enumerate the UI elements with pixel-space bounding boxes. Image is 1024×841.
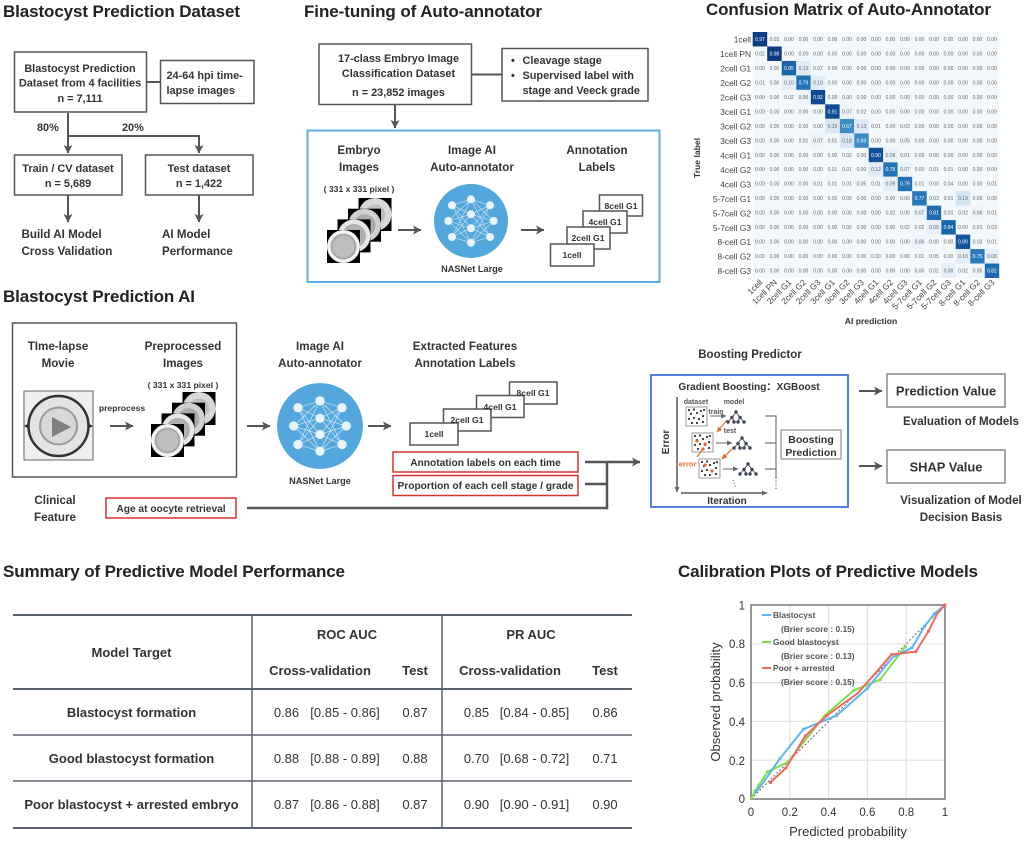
row: blastocyst formation: Blastocyst formation bbox=[67, 705, 196, 720]
legend: (Brier score : 0.15) bbox=[781, 624, 855, 634]
row labels: 5-7cell G3 bbox=[713, 223, 751, 233]
box: proportion of each cell stage bbox=[393, 476, 578, 496]
arrow: dataset to auto-annotator bbox=[394, 105, 396, 128]
heading: image AI auto-annotator: Auto-annotator bbox=[278, 357, 362, 370]
heading: annotation labels: Annotation bbox=[566, 144, 628, 157]
arrow: to auto-annotator bbox=[247, 425, 270, 427]
box: proportion of each cell stage: Proportion of each cell stage / grade bbox=[397, 481, 574, 492]
axis label: AI prediction: AI prediction bbox=[845, 316, 897, 326]
column labels: 2cell G2 bbox=[779, 277, 808, 306]
axis label: predicted probability: Predicted probability bbox=[789, 824, 907, 839]
row: poor blastocyst: [0.90 - 0.91] bbox=[500, 797, 569, 812]
chart: calibration plot bbox=[708, 600, 948, 839]
series: good blastocyst bbox=[751, 645, 907, 799]
box: train dataset: Train / CV dataset bbox=[22, 163, 114, 175]
row: blastocyst formation bbox=[67, 705, 618, 720]
chart: confusion matrix: 0.00 0.00 0.85 0.13 0.02 0.00 0.00 0.00 0.00 0.00 0.00 0.00 0.00 0.00 0.00 0.00 0.00 bbox=[755, 66, 997, 72]
row: good blastocyst formation: Good blastocyst formation bbox=[49, 751, 214, 766]
icon: movie play button bbox=[24, 391, 93, 460]
table header: PR AUC bbox=[506, 627, 556, 642]
label: image size: ( 331 x 331 pixel ) bbox=[324, 184, 394, 194]
row: good blastocyst formation: 0.88 bbox=[402, 751, 428, 766]
panel: auto-annotator training bbox=[308, 130, 660, 282]
box: time-lapse images bbox=[160, 60, 254, 104]
row labels: 3cell G3 bbox=[720, 136, 751, 146]
model trees bbox=[726, 410, 758, 476]
error arrows bbox=[697, 420, 732, 459]
box: SHAP value: SHAP Value bbox=[910, 460, 982, 474]
box: annotation labels on each time bbox=[393, 452, 578, 472]
box: prediction value bbox=[887, 374, 1005, 407]
row labels: 8-cell G2 bbox=[717, 252, 751, 262]
heading: time-lapse movie: Movie bbox=[42, 357, 75, 370]
chart: confusion matrix: 0.00 0.00 0.00 0.00 0.00 0.00 0.02 0.00 0.90 0.08 0.01 0.00 0.00 0.00 0.00 0.00 0.00 bbox=[755, 153, 997, 159]
icon: preprocessed image stack bbox=[151, 392, 216, 457]
column labels: 8-cell G2 bbox=[951, 277, 982, 308]
stack of annotation labels bbox=[410, 382, 557, 445]
axis label: observed probability: Observed probability bbox=[708, 642, 723, 762]
box: classification dataset: n = 23,852 images bbox=[352, 87, 445, 99]
row: blastocyst formation: [0.85 - 0.86] bbox=[310, 705, 380, 720]
stack of annotation labels bbox=[550, 195, 642, 266]
row: good blastocyst formation: [0.88 - 0.89] bbox=[310, 751, 380, 766]
box: label description bbox=[502, 48, 648, 101]
row: blastocyst formation: 0.85 bbox=[464, 705, 489, 720]
arrow bbox=[398, 229, 421, 231]
table header: Cross-validation bbox=[459, 663, 561, 678]
text: visualization: Decision Basis bbox=[920, 511, 1002, 524]
diagram labels: test bbox=[724, 428, 737, 435]
column labels: 4cell G2 bbox=[866, 277, 895, 306]
column labels: 3cell G1 bbox=[808, 277, 837, 306]
stack of annotation labels: 1cell bbox=[424, 429, 444, 439]
box: classification dataset: 17-class Embryo Image bbox=[338, 53, 459, 65]
heading: image AI: Image AI bbox=[448, 144, 496, 157]
column labels: 3cell G3 bbox=[837, 277, 866, 306]
row labels: 5-7cell G2 bbox=[713, 208, 751, 218]
stack of annotation labels: 2cell G1 bbox=[451, 415, 484, 425]
chart: confusion matrix: 0.00 0.00 0.00 0.00 0.00 0.00 0.00 0.00 0.00 0.00 0.00 0.01 0.05 0.00 0.10 0.75 0.08 bbox=[755, 254, 997, 260]
box: annotation labels on each time: Annotation labels on each time bbox=[410, 458, 561, 469]
arrow: to prediction value bbox=[859, 390, 882, 392]
row: good blastocyst formation: [0.68 - 0.72] bbox=[500, 751, 569, 766]
row: blastocyst formation: 0.86 bbox=[592, 705, 618, 720]
chart: confusion matrix: 0.00 0.00 0.00 0.00 0.00 0.01 0.01 0.00 0.12 0.78 0.07 0.00 0.01 0.01 0.00 0.00 0.00 bbox=[755, 167, 997, 173]
y axis ticks bbox=[729, 600, 746, 806]
chart: confusion matrix: 0.00 0.00 0.00 0.00 0.01 0.01 0.01 0.05 0.01 0.09 0.79 0.01 0.00 0.04 0.00 0.00 0.01 bbox=[755, 182, 997, 188]
column labels: 3cell G2 bbox=[823, 277, 852, 306]
stack of annotation labels: 4cell G1 bbox=[484, 402, 517, 412]
arrow: to SHAP value bbox=[859, 465, 882, 467]
chart: confusion matrix: 0.02 0.98 0.00 0.00 0.00 0.00 0.00 0.00 0.00 0.00 0.00 0.00 0.00 0.00 0.00 0.00 0.00 bbox=[755, 52, 997, 58]
text: AI model performance: AI Model bbox=[162, 228, 210, 241]
icon: embryo image stack bbox=[327, 198, 392, 263]
box: test dataset bbox=[146, 155, 253, 195]
row labels: 2cell G2 bbox=[720, 78, 751, 88]
table header bbox=[92, 627, 619, 678]
heading: extracted features: Annotation Labels bbox=[414, 357, 516, 370]
row labels bbox=[713, 35, 751, 276]
column labels: 2cell G1 bbox=[765, 277, 794, 306]
column labels: 4cell G1 bbox=[852, 277, 881, 306]
diagram labels: dataset bbox=[684, 399, 709, 406]
row labels: 1cell bbox=[734, 35, 751, 45]
iteration arrows bbox=[710, 416, 738, 469]
panel: fine-tuning flowchart bbox=[308, 44, 660, 282]
diagram labels bbox=[679, 399, 744, 468]
row labels: 8-cell G3 bbox=[717, 266, 751, 276]
legend bbox=[762, 610, 855, 687]
text: clinical feature: Feature bbox=[34, 511, 76, 524]
box: train dataset: n = 5,689 bbox=[45, 178, 91, 190]
row: poor blastocyst: 0.87 bbox=[274, 797, 299, 812]
axis: iteration bbox=[681, 493, 767, 507]
row: good blastocyst formation: 0.71 bbox=[592, 751, 618, 766]
x axis ticks: 0.4 bbox=[821, 807, 837, 819]
heading: boosting predictor: Boosting Predictor bbox=[698, 349, 802, 361]
legend: Blastocyst bbox=[773, 610, 816, 620]
diagram labels: error bbox=[679, 460, 696, 468]
chart: confusion matrix: 0.00 0.00 0.00 0.00 0.00 0.00 0.00 0.00 0.00 0.00 0.00 0.00 0.02 0.09 0.02 0.05 0.82 bbox=[755, 268, 997, 274]
x axis ticks: 1 bbox=[942, 807, 948, 819]
column labels: 5-7cell G1 bbox=[890, 277, 924, 311]
heading: preprocessed images: Preprocessed bbox=[145, 340, 221, 353]
box: blastocyst prediction dataset: Blastocyst Prediction bbox=[24, 63, 136, 75]
arrow: to extracted features bbox=[368, 425, 391, 427]
heading: embryo images: Embryo bbox=[337, 144, 381, 157]
legend: (Brier score : 0.15) bbox=[781, 677, 855, 687]
ensemble bracket bbox=[765, 416, 776, 490]
box: test dataset: Test dataset bbox=[168, 163, 231, 175]
axis: error: Error bbox=[661, 430, 672, 454]
box: classification dataset: Classification Dataset bbox=[342, 68, 455, 80]
title: Blastocyst Prediction AI: Blastocyst Prediction AI bbox=[3, 287, 195, 306]
box: prediction value: Prediction Value bbox=[896, 384, 996, 398]
y axis ticks: 0.4 bbox=[729, 717, 746, 729]
x axis ticks: 0.6 bbox=[859, 807, 875, 819]
chart: confusion matrix: 0.00 0.00 0.02 0.06 0.92 0.00 0.00 0.00 0.00 0.00 0.00 0.00 0.00 0.00 0.00 0.00 0.00 bbox=[755, 95, 997, 101]
box: label description: Cleavage stage bbox=[522, 55, 602, 67]
arrow: test to performance bbox=[198, 195, 200, 222]
box: blastocyst prediction dataset: Dataset from 4 facilities bbox=[19, 78, 141, 90]
series: poor + arrested bbox=[769, 603, 947, 784]
row labels: 8-cell G1 bbox=[717, 237, 751, 247]
text: AI model performance: Performance bbox=[162, 245, 233, 258]
heading: preprocessed images: Images bbox=[163, 357, 203, 370]
box: time-lapse images: lapse images bbox=[166, 85, 235, 97]
box: boosting prediction: Prediction bbox=[785, 447, 837, 459]
chart: confusion matrix: 0.01 0.00 0.10 0.79 0.10 0.00 0.00 0.00 0.00 0.00 0.00 0.00 0.00 0.00 0.00 0.00 0.00 bbox=[755, 80, 997, 86]
title: Fine-tuning of Auto-annotator: Fine-tuning of Auto-annotator bbox=[304, 2, 542, 21]
row: blastocyst formation: 0.86 bbox=[274, 705, 299, 720]
table: model performance bbox=[13, 615, 632, 828]
box: time-lapse images: 24-64 hpi time- bbox=[166, 70, 243, 82]
chart: confusion matrix: 0.00 0.00 0.00 0.00 0.00 0.00 0.00 0.00 0.00 0.02 0.00 0.07 0.81 0.01 0.02 0.06 0.01 bbox=[755, 211, 997, 217]
row labels: 2cell G3 bbox=[720, 93, 751, 103]
stack of annotation labels: 8cell G1 bbox=[517, 388, 550, 398]
series: blastocyst bbox=[755, 605, 945, 793]
stack of annotation labels: 1cell bbox=[562, 250, 582, 260]
chart: confusion matrix: 0.00 0.00 0.00 0.01 0.07 0.01 0.18 0.69 0.00 0.00 0.05 0.00 0.00 0.00 0.00 0.00 0.00 bbox=[755, 138, 997, 144]
arrow: features to boosting predictor bbox=[247, 462, 640, 508]
heading: gradient boosting: Gradient Boosting：XGBoost bbox=[678, 382, 820, 393]
stack of annotation labels: 8cell G1 bbox=[605, 201, 638, 211]
chart: confusion matrix: 0.00 0.00 0.00 0.00 0.00 0.16 0.67 0.13 0.01 0.00 0.02 0.00 0.00 0.00 0.00 0.00 0.00 bbox=[755, 124, 997, 130]
table header: Test bbox=[592, 663, 619, 678]
arrow: preprocess bbox=[110, 425, 133, 427]
label: image size: ( 331 x 331 pixel ) bbox=[148, 380, 218, 390]
axis: error bbox=[661, 397, 677, 492]
row: good blastocyst formation: 0.70 bbox=[464, 751, 489, 766]
box: test dataset: n = 1,422 bbox=[176, 178, 222, 190]
table header: ROC AUC bbox=[317, 627, 378, 642]
legend: (Brier score : 0.13) bbox=[781, 651, 855, 661]
box: SHAP value bbox=[887, 450, 1005, 483]
stack of annotation labels: 4cell G1 bbox=[589, 217, 622, 227]
row: poor blastocyst bbox=[24, 797, 618, 812]
icon: neural network bbox=[434, 184, 508, 258]
axis label: true label: True label bbox=[692, 138, 702, 178]
column labels: 8-cell G1 bbox=[937, 277, 968, 308]
arrow bbox=[521, 229, 544, 231]
box: train dataset bbox=[14, 155, 122, 195]
title: Confusion Matrix of Auto-Annotator: Confusion Matrix of Auto-Annotator bbox=[706, 0, 991, 19]
heading: extracted features: Extracted Features bbox=[413, 340, 517, 353]
row labels: 3cell G1 bbox=[720, 107, 751, 117]
x axis ticks bbox=[748, 807, 948, 819]
text: visualization: Visualization of Model bbox=[900, 494, 1022, 507]
box: age at oocyte retrieval bbox=[106, 498, 236, 518]
box: age at oocyte retrieval: Age at oocyte retrieval bbox=[116, 504, 226, 515]
x axis ticks: 0.8 bbox=[898, 807, 914, 819]
box: boosting prediction: Boosting bbox=[788, 434, 834, 446]
box: blastocyst prediction dataset bbox=[14, 52, 146, 112]
x axis ticks: 0.2 bbox=[782, 807, 798, 819]
y axis ticks: 0.6 bbox=[729, 678, 745, 690]
row: poor blastocyst: Poor blastocyst + arrested embryo bbox=[24, 797, 239, 812]
text: clinical feature: Clinical bbox=[34, 494, 76, 507]
panel: movie preprocessing bbox=[12, 323, 236, 477]
box: label description: stage and Veeck grade bbox=[522, 85, 640, 97]
row labels: 3cell G2 bbox=[720, 122, 751, 132]
heading: image AI auto-annotator: Image AI bbox=[296, 340, 344, 353]
column labels: 5-7cell G2 bbox=[904, 277, 939, 311]
label: 20%: 20% bbox=[122, 122, 144, 134]
icon: neural network bbox=[277, 383, 363, 469]
text: build AI model: Build AI Model bbox=[22, 228, 102, 241]
chart: confusion matrix: 0.00 0.00 0.00 0.00 0.00 0.00 0.00 0.00 0.00 0.00 0.00 0.06 0.00 0.00 0.89 0.03 0.01 bbox=[755, 240, 997, 246]
panel: gradient boosting bbox=[651, 375, 848, 507]
y axis ticks: 1 bbox=[739, 600, 745, 612]
row labels: 1cell PN bbox=[720, 49, 751, 59]
column labels: 5-7cell G3 bbox=[919, 277, 953, 311]
row labels: 2cell G1 bbox=[720, 64, 751, 74]
title: Calibration Plots of Predictive Models: Calibration Plots of Predictive Models bbox=[678, 562, 978, 581]
box: blastocyst prediction dataset: n = 7,111 bbox=[57, 93, 103, 105]
diagram labels: model bbox=[724, 399, 744, 406]
box: classification dataset bbox=[319, 44, 472, 104]
text: build AI model: Cross Validation bbox=[22, 245, 112, 258]
x axis ticks: 0 bbox=[748, 807, 754, 819]
y axis ticks: 0.8 bbox=[729, 639, 745, 651]
chart: confusion matrix: 0.00 0.00 0.00 0.00 0.00 0.00 0.00 0.00 0.00 0.00 0.02 0.02 0.09 0.84 0.00 0.01 0.03 bbox=[755, 225, 997, 231]
box: label description: Supervised label with bbox=[522, 70, 634, 82]
row: poor blastocyst: 0.90 bbox=[592, 797, 618, 812]
text: evaluation of models: Evaluation of Models bbox=[903, 415, 1019, 428]
label: NASNet Large: NASNet Large bbox=[441, 264, 503, 274]
box: boosting prediction bbox=[781, 430, 841, 459]
column labels bbox=[745, 277, 997, 311]
box: label description: • bbox=[511, 55, 515, 67]
heading: time-lapse movie: TIme-lapse bbox=[28, 340, 88, 353]
y axis ticks: 0 bbox=[739, 794, 745, 806]
row labels: 4cell G3 bbox=[720, 179, 751, 189]
column labels: 8-cell G3 bbox=[966, 277, 997, 308]
column labels: 4cell G3 bbox=[881, 277, 910, 306]
title: Summary of Predictive Model Performance: Summary of Predictive Model Performance bbox=[3, 562, 345, 581]
row: poor blastocyst: 0.90 bbox=[464, 797, 489, 812]
table header: Model Target bbox=[92, 645, 172, 660]
dataset squares bbox=[686, 407, 720, 478]
chart: confusion matrix: 0.97 0.03 0.00 0.00 0.00 0.00 0.00 0.00 0.00 0.00 0.00 0.00 0.00 0.00 0.00 0.00 0.00 bbox=[755, 37, 997, 43]
legend: Good blastocyst bbox=[773, 637, 839, 647]
column labels: 2cell G3 bbox=[794, 277, 823, 306]
stack of annotation labels: 2cell G1 bbox=[572, 233, 605, 243]
table header: Test bbox=[402, 663, 429, 678]
y axis ticks: 0.2 bbox=[729, 756, 745, 768]
row labels: 4cell G2 bbox=[720, 165, 751, 175]
heading: annotation labels: Labels bbox=[579, 161, 615, 174]
heading: image AI: Auto-annotator bbox=[430, 161, 514, 174]
axis: iteration: Iteration bbox=[707, 496, 747, 507]
arrow: split to train and test bbox=[68, 113, 199, 153]
chart: confusion matrix bbox=[692, 32, 999, 326]
diagram labels: train bbox=[708, 409, 724, 416]
row: blastocyst formation: 0.87 bbox=[402, 705, 428, 720]
row: good blastocyst formation bbox=[49, 751, 618, 766]
chart: confusion matrix: 0.00 0.00 0.00 0.00 0.00 0.00 0.00 0.00 0.00 0.00 0.00 0.77 0.03 0.01 0.19 0.00 0.00 bbox=[755, 196, 997, 202]
row: good blastocyst formation: 0.88 bbox=[274, 751, 299, 766]
column labels: 1cell PN bbox=[750, 277, 779, 306]
heading: embryo images: Images bbox=[339, 161, 379, 174]
chart: confusion matrix: 0.00 0.00 0.00 0.00 0.00 0.91 0.07 0.02 0.00 0.00 0.00 0.00 0.00 0.00 0.00 0.00 0.00 bbox=[755, 109, 997, 115]
row: poor blastocyst: [0.86 - 0.88] bbox=[310, 797, 380, 812]
row: blastocyst formation: [0.84 - 0.85] bbox=[500, 705, 569, 720]
table header: Cross-validation bbox=[269, 663, 371, 678]
label: 80%: 80% bbox=[37, 122, 59, 134]
row labels: 4cell G1 bbox=[720, 150, 751, 160]
label: NASNet Large: NASNet Large bbox=[289, 476, 351, 486]
box: label description: • bbox=[511, 70, 515, 82]
row: poor blastocyst: 0.87 bbox=[402, 797, 428, 812]
title: Blastocyst Prediction Dataset: Blastocyst Prediction Dataset bbox=[3, 2, 240, 21]
label: preprocess: preprocess bbox=[99, 403, 145, 413]
legend: Poor + arrested bbox=[773, 663, 835, 673]
row labels: 5-7cell G1 bbox=[713, 194, 751, 204]
column labels: 1cell bbox=[745, 277, 765, 297]
arrow: train to build model bbox=[67, 195, 69, 222]
panel: dataset flowchart bbox=[14, 52, 254, 258]
